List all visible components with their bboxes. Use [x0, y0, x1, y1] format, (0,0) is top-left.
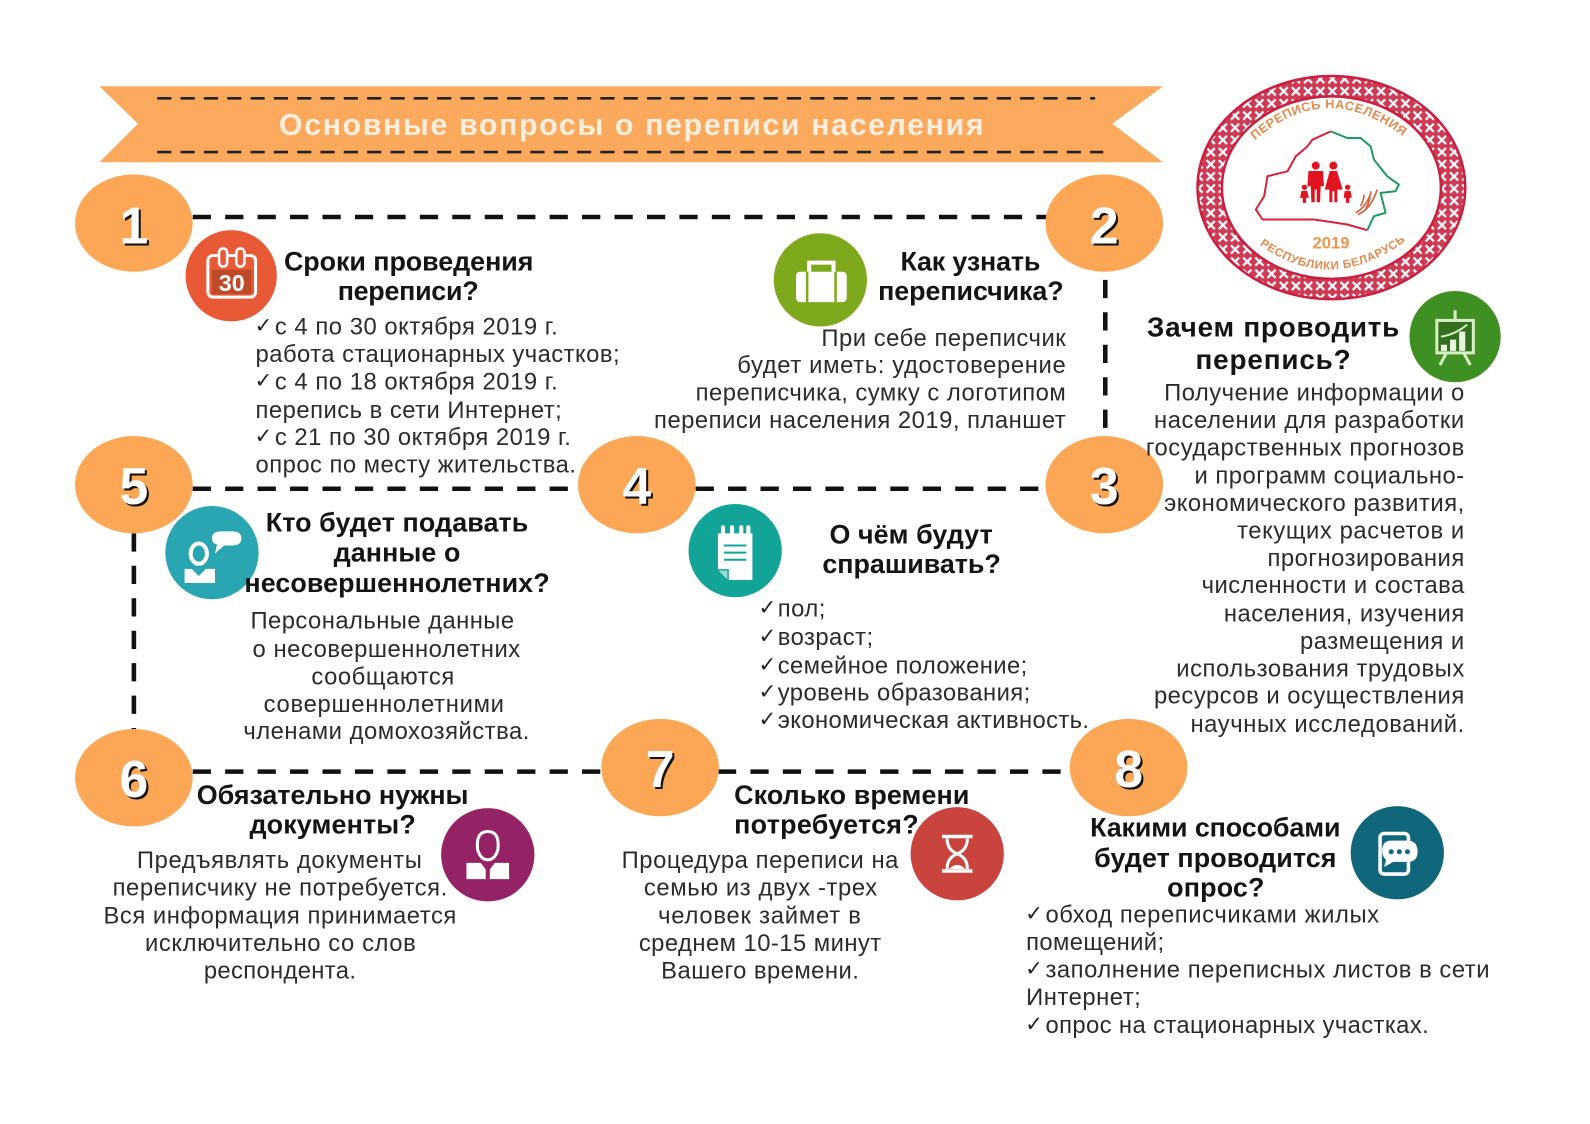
- checklist: ✓: [255, 368, 272, 393]
- checklist: ✓: [758, 680, 776, 705]
- description: размещения и: [1300, 628, 1464, 655]
- description: численности и состава: [1202, 572, 1465, 599]
- number 4: 4: [622, 457, 651, 515]
- heading: О чём будут: [829, 519, 993, 549]
- icon: man in suit: [441, 808, 534, 901]
- description: [243, 608, 529, 745]
- checklist: [255, 314, 620, 479]
- logo bottom text: РЕСПУБЛИКИ БЕЛАРУСЬ: [1260, 238, 1404, 270]
- description: исключительно со слов: [145, 930, 416, 957]
- heading: [284, 247, 533, 306]
- panel 7: how much time: [622, 780, 1004, 984]
- heading: опрос?: [1167, 872, 1264, 902]
- checklist: ✓: [1025, 1012, 1043, 1037]
- heading: потребуется?: [734, 809, 919, 839]
- description: прогнозирования: [1268, 545, 1464, 572]
- panel 6: documents: [103, 780, 534, 984]
- heading: Кто будет подавать: [266, 507, 528, 537]
- heading: Зачем проводить: [1147, 312, 1399, 343]
- icon: notepad: [689, 504, 782, 597]
- number 1: [75, 174, 193, 272]
- icon: phone with chat bubble: [1351, 806, 1444, 899]
- description: использования трудовых: [1176, 655, 1464, 682]
- checklist: [758, 595, 1089, 734]
- number circles: [75, 174, 1187, 826]
- description: экономического развития,: [1164, 490, 1464, 517]
- heading: переписи?: [338, 276, 479, 306]
- number 8: [1070, 719, 1187, 816]
- description: Процедура переписи на: [622, 847, 899, 874]
- logo top text: ПЕРЕПИСЬ НАСЕЛЕНИЯ: [1250, 100, 1408, 140]
- heading: Обязательно нужны: [197, 780, 468, 810]
- heading: [244, 507, 550, 598]
- checklist: обход переписчиками жилых: [1045, 902, 1379, 929]
- heading: [734, 780, 969, 839]
- heading: переписчика?: [878, 276, 1064, 306]
- description: респондента.: [204, 957, 356, 984]
- map of Belarus: [1256, 131, 1399, 230]
- description: [1146, 380, 1465, 738]
- description: будет иметь: удостоверение: [737, 352, 1066, 379]
- title: Основные вопросы о переписи населения: [279, 108, 984, 142]
- description: населения, изучения: [1224, 601, 1464, 628]
- checklist: опрос на стационарных участках.: [1045, 1012, 1429, 1039]
- description: ресурсов и осуществления: [1154, 683, 1464, 710]
- checklist: ✓: [758, 707, 776, 732]
- description: переписи населения 2019, планшет: [654, 407, 1066, 434]
- description: государственных прогнозов: [1146, 434, 1464, 461]
- heading: [197, 780, 468, 839]
- checklist: перепись в сети Интернет;: [256, 397, 562, 424]
- checklist: опрос по месту жительства.: [256, 452, 576, 479]
- family figures: [1300, 162, 1352, 203]
- heading: будет проводится: [1094, 843, 1336, 873]
- icon: suitcase: [774, 233, 867, 327]
- description: Получение информации о: [1164, 380, 1464, 407]
- heading: несовершеннолетних?: [244, 568, 550, 598]
- checklist: [1025, 902, 1490, 1039]
- description: переписчику не потребуется.: [113, 874, 447, 901]
- heading: Сроки проведения: [284, 247, 533, 277]
- heading: [1090, 813, 1341, 902]
- description: Вашего времени.: [661, 957, 859, 984]
- description: Вся информация принимается: [103, 903, 456, 930]
- description: [103, 847, 456, 984]
- description: человек займет в: [658, 903, 861, 930]
- title banner: [99, 86, 1163, 162]
- icon: hourglass: [911, 807, 1004, 900]
- description: Персональные данные: [250, 608, 514, 635]
- census logo: [1196, 74, 1466, 300]
- number 3: [1045, 436, 1163, 533]
- number 4: [578, 436, 696, 533]
- heading: Какими способами: [1090, 813, 1341, 843]
- checklist: помещений;: [1026, 929, 1164, 956]
- icon: calendar: 30: [219, 270, 245, 296]
- panel 2: how to recognise the enumerator: [654, 233, 1066, 434]
- description: совершеннолетними: [264, 691, 504, 718]
- heading: перепись?: [1196, 344, 1351, 375]
- checklist: ✓: [255, 314, 272, 339]
- checklist: экономическая активность.: [778, 707, 1089, 734]
- heading: документы?: [249, 809, 416, 839]
- description: о несовершеннолетних: [253, 636, 520, 663]
- description: текущих расчетов и: [1237, 517, 1464, 544]
- checklist: работа стационарных участков;: [256, 341, 620, 368]
- description: среднем 10-15 минут: [639, 930, 881, 957]
- icon: person with speech bubble: [165, 506, 259, 599]
- number 6: 6: [120, 750, 148, 808]
- heading: [878, 247, 1064, 306]
- heading: Сколько времени: [734, 780, 969, 810]
- checklist: ✓: [758, 624, 776, 649]
- checklist: пол;: [778, 596, 825, 623]
- wheat: [1356, 190, 1377, 215]
- description: и программ социально-: [1195, 463, 1464, 490]
- description: членами домохозяйства.: [243, 718, 529, 745]
- heading: [822, 519, 1001, 579]
- number 2: [1045, 174, 1163, 272]
- description: сообщаются: [311, 663, 454, 690]
- number 5: 5: [120, 457, 148, 515]
- panel 1: dates: [186, 230, 620, 479]
- description: При себе переписчик: [821, 325, 1066, 352]
- panel 4: what will be asked: [689, 504, 1089, 734]
- number 7: 7: [646, 740, 675, 798]
- checklist: с 21 по 30 октября 2019 г.: [275, 424, 571, 451]
- checklist: Интернет;: [1026, 984, 1141, 1011]
- description: переписчика, сумку с логотипом: [696, 380, 1066, 407]
- checklist: возраст;: [778, 624, 873, 651]
- panel 3: why conduct the census: [1146, 291, 1501, 738]
- checklist: заполнение переписных листов в сети: [1045, 956, 1490, 983]
- checklist: ✓: [1025, 902, 1043, 927]
- checklist: с 4 по 30 октября 2019 г.: [275, 314, 558, 341]
- panel 5: minors: [165, 506, 550, 745]
- checklist: ✓: [758, 595, 776, 620]
- dashed connector path: [134, 217, 1105, 772]
- checklist: ✓: [1025, 956, 1043, 981]
- number 1: 1: [120, 196, 148, 254]
- description: Предъявлять документы: [137, 847, 422, 874]
- checklist: ✓: [758, 652, 776, 677]
- panel 8: survey methods: [1025, 806, 1490, 1039]
- number 6: [75, 729, 193, 826]
- checklist: ✓: [255, 424, 272, 449]
- description: [622, 847, 899, 984]
- description: населении для разработки: [1154, 407, 1464, 434]
- description: [654, 325, 1066, 434]
- number 2: 2: [1090, 196, 1119, 254]
- checklist: с 4 по 18 октября 2019 г.: [275, 368, 558, 395]
- checklist: семейное положение;: [778, 652, 1027, 679]
- number 5: [75, 436, 193, 533]
- number 8: 8: [1114, 740, 1143, 798]
- logo year: 2019: [1313, 233, 1349, 252]
- number 7: [601, 719, 719, 816]
- description: научных исследований.: [1190, 711, 1464, 738]
- icon: chart board: [1409, 291, 1501, 382]
- heading: данные о: [334, 538, 460, 568]
- icon: calendar: [186, 230, 277, 321]
- heading: [1147, 312, 1399, 375]
- checklist: уровень образования;: [778, 680, 1030, 707]
- heading: спрашивать?: [822, 549, 1001, 579]
- description: семью из двух -трех: [644, 874, 877, 901]
- heading: Как узнать: [900, 247, 1040, 277]
- number 3: 3: [1090, 457, 1119, 515]
